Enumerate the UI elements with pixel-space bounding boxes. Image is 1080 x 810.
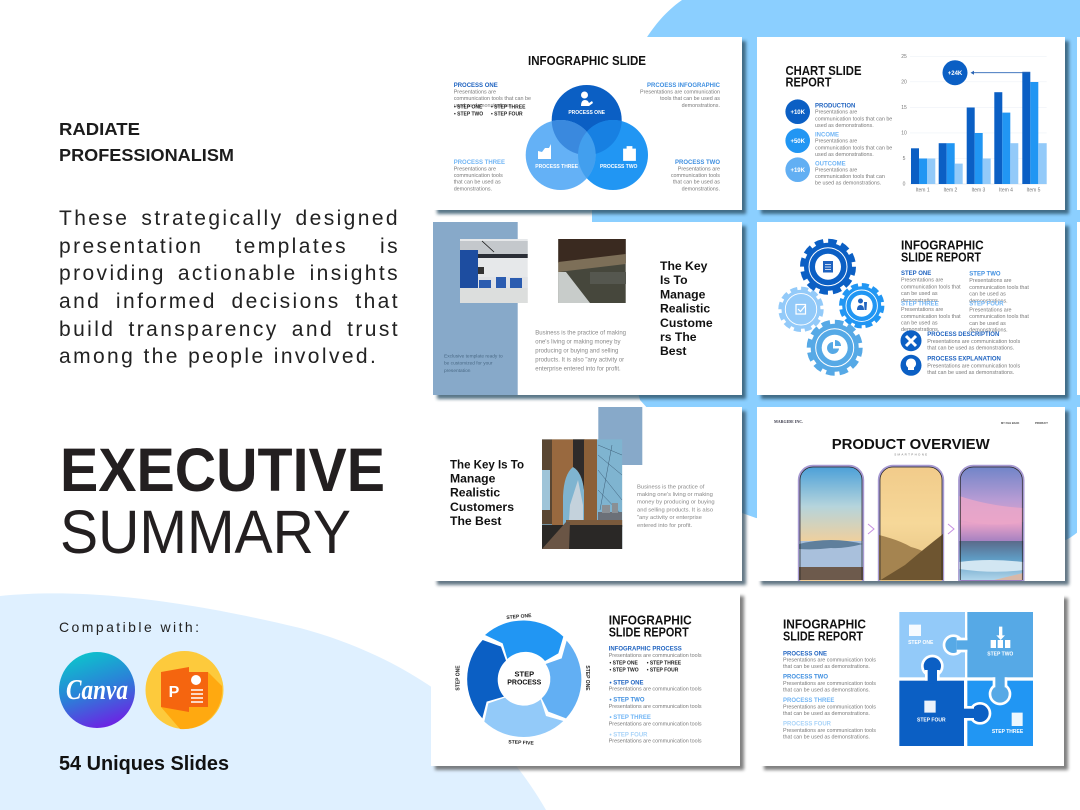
venn diagram: PROCESS TWO bbox=[600, 164, 638, 170]
photo: bridge bbox=[542, 439, 622, 549]
heading bbox=[783, 618, 866, 644]
text: process list: Presentations are communication tools bbox=[783, 681, 876, 687]
puzzle diagram: STEP FOUR bbox=[917, 718, 946, 724]
text: body copy: "any activity or enterprise bbox=[637, 515, 702, 521]
text: process two: PROCESS TWO bbox=[675, 160, 720, 166]
gear diagram bbox=[780, 241, 882, 373]
phone: desert hills bbox=[879, 466, 943, 581]
icon: gear right bbox=[841, 285, 882, 326]
venn diagram bbox=[526, 85, 648, 190]
item: process explanation: Presentations are communication tools bbox=[927, 364, 1020, 370]
panel: chart slide bbox=[757, 37, 1069, 214]
text: process two: Presentations are bbox=[678, 166, 720, 172]
phone: coast fog bbox=[799, 466, 863, 581]
text: process three bbox=[454, 160, 505, 192]
text: process list: • STEP ONE bbox=[610, 661, 638, 667]
arrow bbox=[948, 524, 954, 534]
text: heading: Customers bbox=[450, 500, 514, 514]
stat: production bbox=[785, 99, 892, 129]
text: steps: demonstrations. bbox=[969, 328, 1008, 334]
text: process one: PROCESS ONE bbox=[454, 83, 498, 89]
text: process list: that can be used as demonstrations. bbox=[783, 664, 870, 670]
photo: dark office bbox=[558, 239, 626, 303]
text: steps bbox=[901, 271, 1029, 334]
icon: powerpoint logo bbox=[146, 651, 224, 729]
text: steps: Presentations are bbox=[969, 278, 1012, 284]
text: heading: rs The bbox=[660, 330, 697, 344]
icon: canva logo: Canva bbox=[66, 675, 128, 706]
cycle diagram: STEP bbox=[515, 670, 534, 679]
item: process explanation: that can be used as demonstrations. bbox=[927, 370, 1014, 376]
text: process one: used as demonstrations. bbox=[454, 103, 512, 109]
heading bbox=[901, 239, 984, 265]
compatible with label: Compatible with: bbox=[59, 619, 199, 635]
text: process two: communication tools bbox=[671, 173, 720, 179]
puzzle diagram: STEP ONE bbox=[908, 640, 934, 646]
panel: venn infographic slide: INFOGRAPHIC SLIDE bbox=[528, 54, 646, 68]
text: process list: PROCESS ONE bbox=[783, 651, 827, 657]
top navigation bbox=[774, 419, 1048, 425]
stat: outcome: Presentations are bbox=[815, 168, 857, 174]
callout: +24K arrow: +24K bbox=[948, 71, 963, 77]
stat: outcome: OUTCOME bbox=[815, 161, 846, 167]
heading bbox=[609, 614, 692, 640]
text: panel caption: Exclusive template ready to bbox=[444, 353, 503, 359]
text: heading: Manage bbox=[450, 472, 496, 486]
text: process two: that can be used as bbox=[673, 180, 720, 186]
cycle diagram: STEP FIVE bbox=[508, 739, 535, 747]
puzzle diagram bbox=[899, 612, 1033, 746]
text: body copy: products. It is also "any activity or bbox=[535, 357, 624, 363]
text: process list: • STEP THREE bbox=[610, 715, 651, 721]
text: heading: Realistic bbox=[660, 302, 710, 316]
text: description paragraph: among the people involved. bbox=[59, 345, 378, 368]
text: process list: that can be used as demonstrations. bbox=[783, 688, 870, 694]
text: process list: • STEP THREE bbox=[647, 661, 682, 667]
text: process list: • STEP FOUR bbox=[647, 668, 679, 674]
heading: CHART SLIDE bbox=[786, 64, 862, 78]
panel: bridge photo slide bbox=[433, 407, 746, 585]
text: steps: can be used as bbox=[969, 292, 1006, 298]
text: steps: demonstrations. bbox=[969, 298, 1008, 304]
phone: beach sunset bbox=[959, 466, 1023, 581]
heading: SMARTPHONE bbox=[894, 452, 927, 456]
top navigation: PRODUCT bbox=[1035, 421, 1048, 425]
text: process list: Presentations are communication tools bbox=[783, 728, 876, 734]
top navigation: MARGIDE INC. bbox=[774, 419, 803, 424]
heading: SLIDE REPORT bbox=[783, 630, 863, 644]
stat: income bbox=[785, 128, 892, 158]
text: process one bbox=[454, 83, 531, 118]
text: body copy bbox=[535, 330, 626, 372]
bar chart: 0 bbox=[903, 182, 906, 188]
panel: gears slide bbox=[757, 222, 1069, 399]
text: steps: demonstrations. bbox=[901, 298, 939, 304]
text: heading: The Key Is To bbox=[450, 457, 524, 471]
text: body copy: producing or buying and selling bbox=[535, 348, 618, 354]
text: steps: communication tools that bbox=[901, 314, 961, 320]
text: body copy: Business is the practice of making bbox=[535, 330, 626, 336]
photo: blue office bbox=[460, 239, 528, 303]
bar chart: Item 1 bbox=[916, 188, 930, 194]
left heading: PROFESSIONALISM bbox=[59, 145, 234, 165]
text: process infographic: demonstrations. bbox=[682, 103, 720, 109]
text: process infographic: tools that can be used as bbox=[660, 96, 720, 102]
text: description paragraph: presentation templates is bbox=[59, 235, 400, 258]
text: process list: Presentations are communication tools bbox=[609, 653, 702, 659]
bar chart: Item 4 bbox=[999, 188, 1013, 194]
text: steps: Presentations are bbox=[901, 307, 943, 313]
bar chart: Item 3 bbox=[971, 188, 986, 194]
icon: powerpoint logo: P bbox=[169, 684, 180, 701]
stat: production: Presentations are bbox=[815, 110, 857, 116]
bar chart: 5 bbox=[903, 156, 906, 162]
text: heading: Best bbox=[660, 344, 686, 358]
text: body copy: one's living or making money by bbox=[535, 339, 620, 345]
text: body copy: enterprise entered into for profit. bbox=[535, 366, 621, 372]
text: process one: • STEP THREE bbox=[491, 104, 526, 110]
slide count: 54 Uniques Slides bbox=[59, 753, 229, 775]
stat: outcome: communication tools that can bbox=[815, 174, 885, 180]
text: process three: PROCESS THREE bbox=[454, 160, 505, 166]
text: process infographic bbox=[640, 83, 721, 109]
text: process one: • STEP ONE bbox=[454, 104, 483, 110]
text: process list: PROCESS FOUR bbox=[783, 722, 832, 728]
text: process list: • STEP ONE bbox=[610, 680, 644, 686]
text: process three: that can be used as bbox=[454, 180, 501, 186]
text: steps: STEP ONE bbox=[901, 271, 931, 277]
text: heading: Custome bbox=[660, 316, 713, 330]
bar chart: 20 bbox=[901, 80, 907, 86]
text: heading: The Best bbox=[450, 514, 501, 528]
icon: gear top bbox=[802, 241, 854, 292]
text: process one: • STEP TWO bbox=[454, 112, 483, 118]
sliver of further slides at right edge bbox=[1077, 37, 1080, 581]
stat: income: INCOME bbox=[815, 133, 839, 139]
bar chart: 15 bbox=[901, 105, 907, 111]
text: description paragraph bbox=[59, 207, 400, 368]
stat: outcome: be used as demonstrations. bbox=[815, 181, 881, 187]
text: heading bbox=[660, 259, 713, 358]
text: steps: can be used as bbox=[969, 321, 1006, 327]
text: process list: Presentations are communication tools bbox=[609, 704, 702, 710]
icon: gear left bbox=[780, 289, 822, 330]
text: heading: Is To bbox=[660, 273, 688, 287]
item: process explanation bbox=[900, 355, 1020, 376]
cycle diagram: STEP ONE bbox=[456, 665, 462, 691]
text: process three: communication tools bbox=[454, 173, 503, 179]
puzzle diagram: STEP THREE bbox=[992, 729, 1024, 735]
text: steps: STEP THREE bbox=[901, 302, 939, 308]
heading: PRODUCT OVERVIEW bbox=[832, 436, 991, 453]
heading: REPORT bbox=[786, 76, 832, 90]
text: process list bbox=[783, 651, 876, 740]
text: process infographic: PRCOESS INFOGRAPHIC bbox=[647, 83, 721, 89]
heading: INFOGRAPHIC bbox=[901, 239, 984, 253]
text: process list bbox=[609, 647, 702, 745]
text: body copy: making one's living or making bbox=[637, 492, 713, 498]
text: steps: communication tools that bbox=[901, 284, 961, 290]
icon: canva logo bbox=[59, 652, 135, 728]
text: steps: STEP TWO bbox=[969, 272, 1001, 278]
text: process three: demonstrations. bbox=[454, 186, 492, 192]
bar chart: Item 2 bbox=[943, 188, 958, 194]
bar chart bbox=[901, 54, 1047, 194]
text: process three: Presentations are bbox=[454, 166, 496, 172]
item: process description: that can be used as demonstrations. bbox=[927, 346, 1014, 352]
text: heading bbox=[450, 457, 524, 528]
stat: income: +50K bbox=[790, 139, 806, 145]
text: body copy: money by producing or buying bbox=[637, 500, 715, 506]
text: body copy: entered into for profit. bbox=[637, 523, 692, 529]
heading bbox=[786, 64, 862, 90]
item: process description: Presentations are communication tools bbox=[927, 339, 1020, 345]
text: steps: communication tools that bbox=[969, 314, 1029, 320]
stat: production: PRODUCTION bbox=[815, 104, 855, 110]
text: heading: The Key bbox=[660, 259, 708, 273]
text: process list: Presentations are communication tools bbox=[783, 658, 876, 664]
stat: production: +10K bbox=[790, 110, 806, 116]
text: process list: PROCESS TWO bbox=[783, 675, 828, 681]
text: process list: Presentations are communication tools bbox=[609, 687, 702, 693]
main title: SUMMARY bbox=[60, 498, 351, 566]
text: description paragraph: build transparency and trust bbox=[59, 318, 400, 341]
cycle diagram: STEP ONE bbox=[506, 613, 532, 621]
stat: income: used as demonstrations. bbox=[815, 152, 874, 158]
panel: puzzle slide bbox=[760, 594, 1068, 770]
text: steps: STEP FOUR bbox=[969, 302, 1004, 308]
item: process description bbox=[900, 330, 1020, 352]
text: steps: demonstrations. bbox=[901, 327, 939, 333]
text: steps: Presentations are bbox=[901, 278, 943, 284]
venn diagram: PROCESS ONE bbox=[568, 110, 606, 116]
background: light blue blob bbox=[592, 0, 1080, 540]
text: panel caption: presentation bbox=[444, 368, 471, 374]
main title bbox=[60, 436, 385, 566]
puzzle diagram: STEP TWO bbox=[987, 652, 1013, 658]
callout: +24K arrow bbox=[942, 60, 1030, 85]
text: process one: Presentations are bbox=[454, 90, 496, 96]
item: process explanation: PROCESS EXPLANATION bbox=[927, 357, 1001, 363]
stat: income: communication tools that can be bbox=[815, 145, 892, 151]
bar chart: 25 bbox=[901, 54, 907, 60]
text: body copy bbox=[637, 484, 715, 529]
heading: INFOGRAPHIC bbox=[783, 618, 866, 632]
text: process one: • STEP FOUR bbox=[491, 112, 523, 118]
text: process list: • STEP TWO bbox=[610, 698, 645, 704]
stat: income: Presentations are bbox=[815, 139, 857, 145]
heading: SLIDE REPORT bbox=[901, 251, 981, 265]
text: steps: can be used as bbox=[901, 291, 938, 297]
text: steps: can be used as bbox=[901, 320, 938, 326]
stat: production: used as demonstrations. bbox=[815, 123, 874, 129]
text: process list: • STEP TWO bbox=[610, 668, 639, 674]
cycle diagram bbox=[456, 613, 590, 747]
text: process two: demonstrations. bbox=[682, 186, 720, 192]
text: process list: Presentations are communication tools bbox=[609, 722, 702, 728]
text: panel caption: be customized for your bbox=[444, 361, 493, 367]
text: body copy: and selling products. It is also bbox=[637, 507, 713, 513]
stat: outcome bbox=[785, 157, 885, 187]
cycle diagram: PROCESS bbox=[507, 677, 541, 686]
heading: INFOGRAPHIC bbox=[609, 614, 692, 628]
text: heading: Manage bbox=[660, 287, 706, 301]
panel: product overview slide bbox=[757, 407, 1069, 585]
arrow bbox=[868, 524, 874, 534]
bar chart: Item 5 bbox=[1027, 188, 1041, 194]
text: description paragraph: and informed decisions that bbox=[59, 290, 400, 313]
text: steps: Presentations are bbox=[969, 308, 1012, 314]
text: process list: • STEP FOUR bbox=[610, 732, 648, 738]
text: body copy: Business is the practice of bbox=[637, 484, 705, 490]
stat: production: communication tools that can be bbox=[815, 116, 892, 122]
main title: EXECUTIVE bbox=[60, 436, 385, 504]
text: process one: communication tools that can be bbox=[454, 96, 531, 102]
panel: venn infographic slide bbox=[433, 37, 746, 214]
icon: gear bottom bbox=[809, 322, 860, 373]
venn diagram: PROCESS THREE bbox=[535, 164, 579, 170]
text: process infographic: Presentations are communication bbox=[640, 90, 720, 96]
text: process list: that can be used as demonstrations. bbox=[783, 734, 870, 740]
text: heading: Realistic bbox=[450, 486, 500, 500]
heading: SLIDE REPORT bbox=[609, 626, 689, 640]
text: process list: PROCESS THREE bbox=[783, 698, 834, 704]
text: process list: INFOGRAPHIC PROCESS bbox=[609, 647, 682, 653]
stat: outcome: +19K bbox=[790, 168, 806, 174]
text: process list: Presentations are communication tools bbox=[783, 704, 876, 710]
text: panel caption bbox=[444, 353, 503, 374]
left heading: RADIATE bbox=[59, 119, 140, 139]
text: description paragraph: providing actionable insights bbox=[59, 262, 400, 285]
text: process two bbox=[671, 160, 720, 192]
text: steps: communication tools that bbox=[969, 285, 1029, 291]
panel: step process slide bbox=[431, 592, 744, 770]
bar chart: 10 bbox=[901, 130, 907, 136]
top navigation: MY FILE BACK bbox=[1001, 421, 1020, 425]
panel: office photos slide bbox=[433, 222, 746, 399]
text: description paragraph: These strategically designed bbox=[59, 207, 400, 230]
text: process list: that can be used as demonstrations. bbox=[783, 711, 870, 717]
cycle diagram: STEP ONE bbox=[584, 665, 590, 691]
left heading bbox=[59, 119, 234, 165]
background: pale blue corner shape bbox=[0, 593, 546, 810]
item: process description: PROCESS DESCRIPTION bbox=[927, 332, 999, 338]
text: process list: Presentations are communication tools bbox=[609, 739, 702, 745]
